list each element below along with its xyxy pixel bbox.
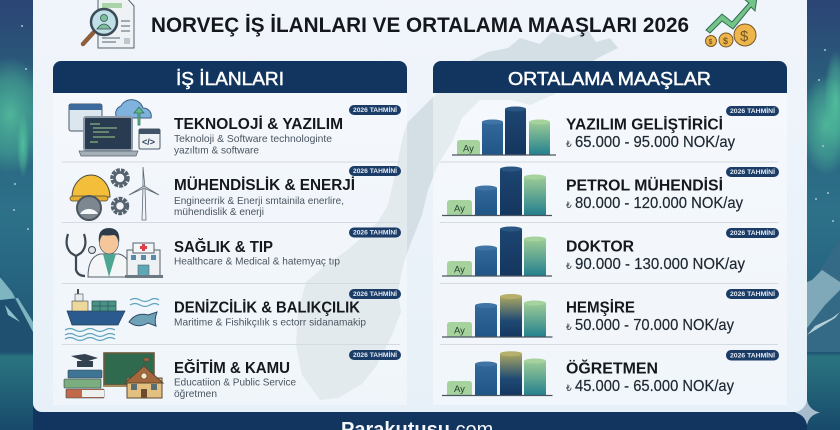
- description: maritime and fishing: Maritime & Fishikçılık s ectorr sidanamakip: [174, 316, 366, 328]
- heading: technology: TEKNOLOJİ & YAZILIM: [174, 115, 343, 133]
- icon: sparkle: [795, 400, 820, 425]
- panel: average salaries: [433, 61, 787, 405]
- badge: 2026 estimate: [726, 167, 779, 177]
- description: engineering: Engineerrik & Enerji smtainila enerlire,: [174, 195, 344, 207]
- icon: cargo ship, waves, fish: [65, 289, 159, 340]
- row: education and public: [64, 350, 401, 400]
- badge: 2026 estimate: [726, 106, 779, 116]
- icon: resume with magnifier: [83, 0, 134, 48]
- heading: engineering: MÜHENDİSLİK & ENERJİ: [174, 175, 355, 194]
- panel: job listings: [53, 61, 407, 405]
- badge: 2026 estimate: 2026 TAHMİNİ: [730, 108, 775, 115]
- badge: 2026 estimate: 2026 TAHMİNİ: [730, 291, 775, 298]
- icon: rising arrow with coins: [706, 0, 757, 47]
- badge: 2026 estimate: [726, 228, 779, 238]
- row: doctor: [442, 226, 779, 276]
- description: healthcare: Healthcare & Medical & hatemyaç tıp: [174, 256, 340, 268]
- badge: 2026 estimate: [349, 350, 401, 360]
- icon: laptop and cloud: </>: [142, 137, 155, 147]
- footer bar: [33, 405, 807, 430]
- badge: 2026 estimate: 2026 TAHMİNİ: [730, 352, 775, 359]
- heading: average salaries: [433, 61, 787, 93]
- salary: software developer: 65.000 - 95.000 NOK/ay: [575, 134, 735, 151]
- heading: average salaries: ORTALAMA MAAŞLAR: [508, 68, 711, 89]
- heading: job listings: [53, 61, 407, 93]
- icon: rising arrow with coins: $: [740, 28, 749, 45]
- row: engineering: mühendislik & enerji: [174, 206, 264, 218]
- bar chart: teacher: Ay: [454, 384, 465, 395]
- row: engineering: [70, 166, 401, 220]
- row: software developer: [452, 106, 779, 155]
- heading: healthcare: SAĞLIK & TIP: [174, 237, 273, 256]
- salary: teacher: 45.000 - 65.000 NOK/ay: [575, 378, 734, 395]
- heading: job listings: İŞ İLANLARI: [176, 68, 284, 89]
- title: NORVEÇ İŞ İLANLARI VE ORTALAMA MAAŞLARI 2026: [151, 14, 689, 37]
- badge: 2026 estimate: 2026 TAHMİNİ: [730, 169, 775, 176]
- bar chart: nurse: [442, 294, 552, 337]
- bar chart: nurse: Ay: [454, 326, 465, 336]
- badge: 2026 estimate: [349, 228, 401, 238]
- salary: nurse: 50.000 - 70.000 NOK/ay: [575, 317, 734, 334]
- icon: rising arrow with coins: $: [723, 36, 728, 46]
- row: healthcare: [67, 228, 401, 278]
- description: technology: Teknoloji & Software technologinte: [174, 133, 332, 145]
- badge: 2026 estimate: 2026 TAHMİNİ: [353, 291, 397, 298]
- bar chart: doctor: Ay: [454, 264, 465, 276]
- heading: teacher: ÖĞRETMEN: [566, 358, 658, 378]
- row: education and public: öğretmen: [174, 388, 217, 400]
- heading: maritime and fishing: DENİZCİLİK & BALIKÇILIK: [174, 298, 360, 316]
- badge: 2026 estimate: 2026 TAHMİNİ: [353, 352, 397, 359]
- badge: 2026 estimate: 2026 TAHMİNİ: [353, 230, 397, 237]
- heading: education and public: EĞİTİM & KAMU: [174, 358, 290, 377]
- icon: laptop and cloud: [69, 100, 160, 156]
- salary: nurse: ₺: [566, 322, 572, 332]
- bar chart: petroleum engineer: [442, 166, 552, 216]
- heading: doctor: DOKTOR: [566, 238, 634, 256]
- salary: petroleum engineer: ₺: [566, 200, 572, 210]
- salary: petroleum engineer: 80.000 - 120.000 NOK/ay: [575, 195, 743, 212]
- row: maritime and fishing: [65, 289, 401, 340]
- bar chart: software developer: Ay: [463, 144, 474, 154]
- heading: petroleum engineer: PETROL MÜHENDİSİ: [566, 176, 723, 194]
- badge: 2026 estimate: 2026 TAHMİNİ: [353, 107, 397, 114]
- badge: 2026 estimate: [726, 289, 779, 299]
- row: teacher: [442, 350, 779, 396]
- icon: doctor, stethoscope, hospital: [67, 228, 163, 278]
- badge: 2026 estimate: [349, 105, 401, 115]
- badge: 2026 estimate: 2026 TAHMİNİ: [730, 230, 775, 237]
- salary: doctor: 90.000 - 130.000 NOK/ay: [575, 256, 745, 273]
- bar chart: software developer: [452, 106, 556, 155]
- salary: software developer: ₺: [566, 139, 572, 149]
- description: education and public: Educatiion & Public Service: [174, 376, 296, 388]
- heading: nurse: HEMŞİRE: [566, 298, 635, 316]
- badge: 2026 estimate: [349, 166, 401, 176]
- bar chart: teacher: [442, 351, 552, 396]
- row: petroleum engineer: [442, 166, 779, 216]
- row: technology: yazıltım & software: [174, 144, 259, 156]
- icon: rising arrow with coins: $: [708, 39, 712, 46]
- bar chart: doctor: [442, 226, 552, 276]
- icon: books, chalkboard, school: [64, 353, 163, 398]
- badge: 2026 estimate: [349, 289, 401, 299]
- badge: 2026 estimate: [726, 350, 779, 360]
- row: nurse: [442, 289, 779, 337]
- icon: hard hat, gears, wind turbine: [70, 167, 159, 220]
- badge: 2026 estimate: 2026 TAHMİNİ: [353, 168, 397, 175]
- heading: software developer: YAZILIM GELİŞTİRİCİ: [566, 116, 723, 134]
- salary: teacher: ₺: [566, 383, 572, 393]
- bar chart: petroleum engineer: Ay: [454, 204, 465, 214]
- row: technology: [69, 100, 401, 156]
- salary: doctor: ₺: [566, 261, 572, 271]
- map of Norway watermark: [296, 30, 618, 400]
